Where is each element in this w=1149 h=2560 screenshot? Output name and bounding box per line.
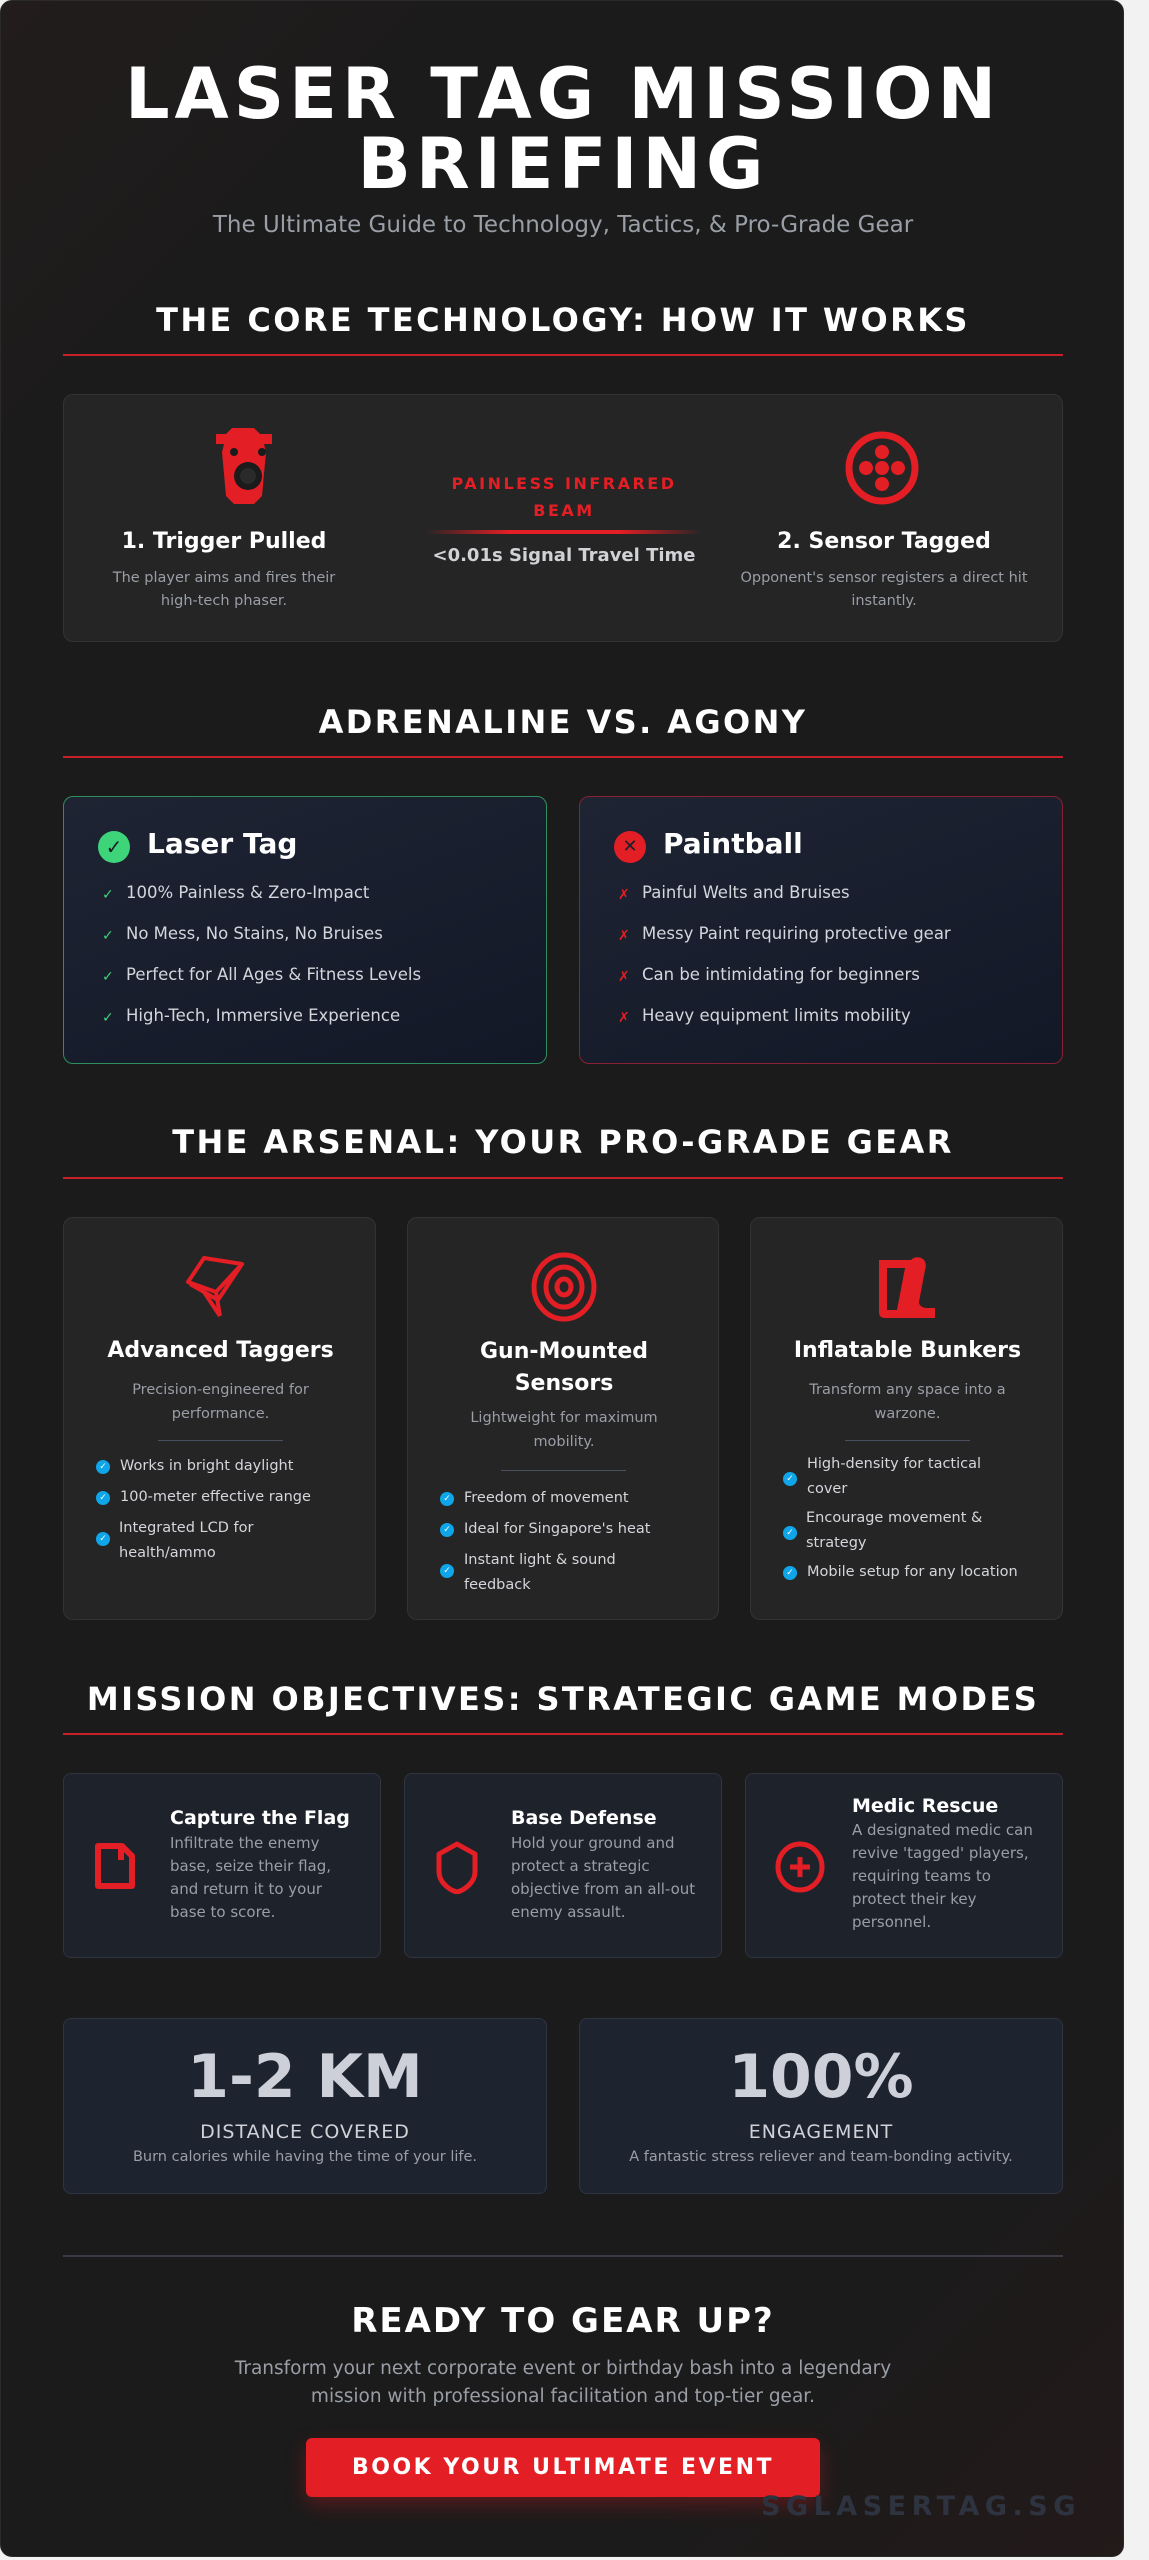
feature list: Mobile setup for any location: [807, 1564, 1018, 1580]
panel: advanced taggers: [63, 1217, 376, 1620]
icon: shield: [436, 1842, 478, 1894]
laser tag list: ✓: [102, 969, 114, 985]
laser tag list: Perfect for All Ages & Fitness Levels: [126, 965, 421, 984]
stat: engagement: ENGAGEMENT: [749, 2121, 893, 2143]
description: Hold your ground and protect a strategic objective from an all-out enemy assault.: [511, 1834, 695, 1921]
description: Transform any space into a warzone.: [809, 1382, 1006, 1422]
icon: tagger: [186, 1256, 244, 1318]
cta text: Transform your next corporate event or birthday bash into a legendary mission with professional facilitation and top-tier gear.: [235, 2358, 891, 2407]
stat: engagement: [579, 2018, 1063, 2194]
feature list: Freedom of movement: [464, 1490, 629, 1506]
paintball list: [618, 883, 951, 1026]
step 2 description: Opponent's sensor registers a direct hit instantly.: [740, 570, 1028, 609]
watermark: SGLASERTAG.SG: [761, 2491, 1081, 2522]
beam label: PAINLESS INFRARED: [451, 474, 676, 493]
laser tag list: [102, 883, 421, 1026]
feature list: ✓: [99, 1493, 107, 1503]
panel: medic rescue: Medic Rescue: [852, 1795, 998, 1817]
feature list: Works in bright daylight: [120, 1458, 293, 1474]
stat: distance: [63, 2018, 547, 2194]
description: Infiltrate the enemy base, seize their flag, and return it to your base to score.: [170, 1834, 331, 1921]
feature list: ✓: [786, 1528, 794, 1538]
laser tag list: ✓: [102, 928, 114, 944]
panel: paintball: [579, 796, 1063, 1064]
paintball title: Paintball: [663, 827, 803, 860]
icon: red x: [614, 831, 646, 863]
heading: core technology: THE CORE TECHNOLOGY: HOW IT WORKS: [156, 301, 970, 339]
stat: engagement: 100%: [728, 2042, 914, 2112]
panel: base defense: Base Defense: [511, 1807, 657, 1829]
icon: bunker: [879, 1257, 935, 1318]
feature list: [96, 1458, 311, 1561]
icon: trigger: [216, 428, 272, 504]
panel: capture the flag: [63, 1773, 381, 1958]
paintball list: ✗: [618, 969, 630, 985]
icon: medic: [776, 1842, 824, 1892]
step 2 title: 2. Sensor Tagged: [777, 529, 991, 554]
icon: sensor: [846, 432, 918, 504]
title: LASER TAG MISSION: [125, 53, 1001, 135]
feature list: ✓: [443, 1566, 451, 1576]
signal time: <0.01s Signal Travel Time: [432, 545, 696, 566]
beam label: [451, 474, 676, 520]
laser tag title: Laser Tag: [147, 827, 297, 860]
cta heading: READY TO GEAR UP?: [351, 2301, 775, 2341]
feature list: [783, 1456, 1018, 1580]
beam label: BEAM: [533, 501, 595, 520]
feature list: ✓: [99, 1534, 107, 1544]
paintball list: ✗: [618, 1010, 630, 1026]
feature list: ✓: [786, 1568, 794, 1578]
panel: gun-mounted sensors: [407, 1217, 719, 1620]
panel: inflatable bunkers: [750, 1217, 1063, 1620]
step 1 title: 1. Trigger Pulled: [122, 529, 326, 554]
panel: core technology: [63, 394, 1063, 642]
title: BRIEFING: [357, 123, 769, 205]
icon: red x: ✕: [622, 836, 638, 857]
panel: base defense: [404, 1773, 722, 1958]
feature list: High-density for tactical cover: [807, 1456, 981, 1497]
stat: engagement: A fantastic stress reliever and team-bonding activity.: [629, 2149, 1013, 2165]
paintball list: ✗: [618, 928, 630, 944]
description: Precision-engineered for performance.: [132, 1382, 309, 1422]
paintball list: Messy Paint requiring protective gear: [642, 924, 951, 943]
feature list: 100-meter effective range: [120, 1489, 311, 1505]
title: Inflatable Bunkers: [794, 1338, 1021, 1363]
panel: laser tag: [63, 796, 547, 1064]
panel: medic rescue: [745, 1773, 1063, 1958]
cta button: BOOK YOUR ULTIMATE EVENT: [352, 2455, 774, 2480]
feature list: ✓: [99, 1462, 107, 1472]
title: Advanced Taggers: [107, 1338, 334, 1363]
paintball list: ✗: [618, 887, 630, 903]
icon: green check: ✓: [106, 835, 122, 859]
feature list: [440, 1490, 650, 1593]
paintball list: Painful Welts and Bruises: [642, 883, 850, 902]
feature list: ✓: [443, 1525, 451, 1535]
paintball list: Heavy equipment limits mobility: [642, 1006, 911, 1025]
heading: arsenal: THE ARSENAL: YOUR PRO-GRADE GEAR: [172, 1123, 954, 1161]
paintball list: Can be intimidating for beginners: [642, 965, 920, 984]
stat: distance: DISTANCE COVERED: [200, 2121, 410, 2143]
cta button: [306, 2438, 820, 2497]
feature list: Ideal for Singapore's heat: [464, 1521, 650, 1537]
icon: green check: [98, 831, 130, 863]
laser tag list: ✓: [102, 887, 114, 903]
feature list: Encourage movement & strategy: [806, 1510, 982, 1551]
feature list: Instant light & sound feedback: [464, 1552, 616, 1593]
feature list: ✓: [443, 1494, 451, 1504]
subtitle: The Ultimate Guide to Technology, Tactics, & Pro-Grade Gear: [213, 212, 913, 238]
feature list: Integrated LCD for health/ammo: [119, 1520, 253, 1561]
stat: distance: Burn calories while having the time of your life.: [133, 2149, 477, 2165]
icon: flag/document: [95, 1843, 135, 1889]
heading: mission objectives: MISSION OBJECTIVES: STRATEGIC GAME MODES: [87, 1680, 1039, 1718]
title: [125, 53, 1001, 205]
laser tag list: ✓: [102, 1010, 114, 1026]
panel: capture the flag: Capture the Flag: [170, 1807, 350, 1829]
laser tag list: No Mess, No Stains, No Bruises: [126, 924, 383, 943]
beam line: [426, 530, 702, 534]
heading: adrenaline vs agony: ADRENALINE VS. AGONY: [319, 703, 807, 741]
title: Gun-Mounted Sensors: [480, 1339, 648, 1396]
laser tag list: High-Tech, Immersive Experience: [126, 1006, 400, 1025]
step 1 description: The player aims and fires their high-tech phaser.: [113, 570, 335, 609]
description: A designated medic can revive 'tagged' players, requiring teams to protect their key personnel.: [852, 1821, 1033, 1931]
stat: distance: 1-2 KM: [187, 2042, 423, 2112]
description: Lightweight for maximum mobility.: [470, 1410, 658, 1450]
laser tag list: 100% Painless & Zero-Impact: [126, 883, 369, 902]
feature list: ✓: [786, 1474, 794, 1484]
icon: target: [532, 1252, 596, 1322]
